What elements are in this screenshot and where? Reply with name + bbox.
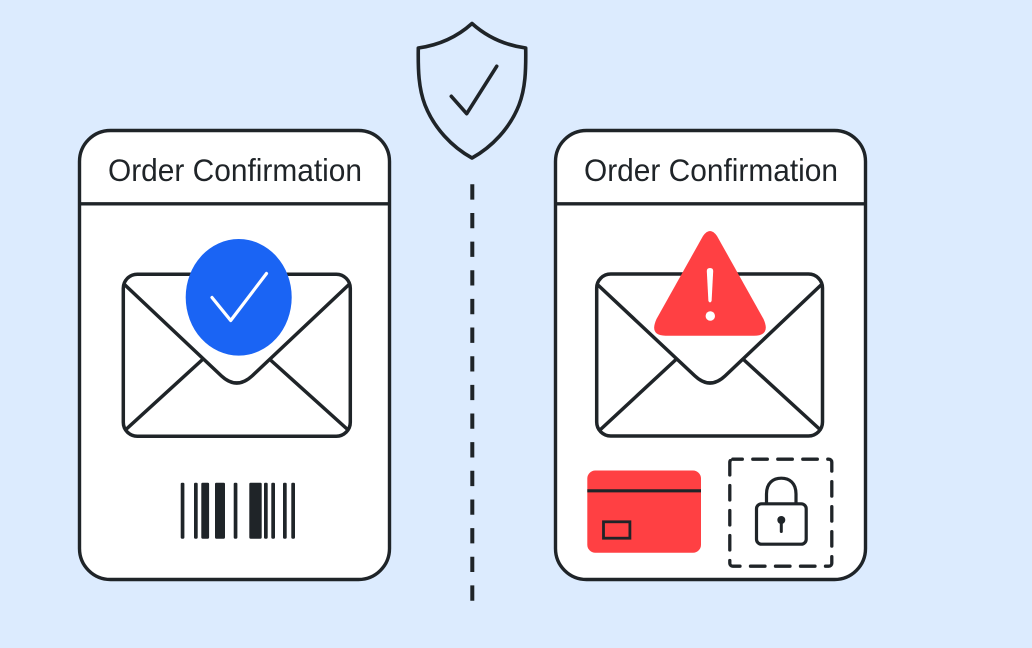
icon: red credit card: [587, 470, 701, 553]
panel: legitimate order confirmation: [80, 130, 390, 580]
icon: security shield with check: [418, 24, 526, 158]
icon: envelope: [123, 274, 350, 436]
icon: barcode: [181, 483, 295, 539]
panel: suspicious order confirmation: [556, 130, 866, 580]
card outline: [556, 130, 866, 580]
icon: envelope: [597, 274, 822, 436]
icon: red warning triangle: [654, 231, 766, 336]
heading: Order Confirmation: [584, 152, 838, 188]
heading: Order Confirmation: [108, 152, 362, 188]
icon: blue check badge: [186, 239, 292, 356]
divider: dashed vertical line: [470, 184, 474, 601]
card outline: [80, 130, 390, 580]
icon: padlock in dashed frame: [730, 459, 832, 566]
